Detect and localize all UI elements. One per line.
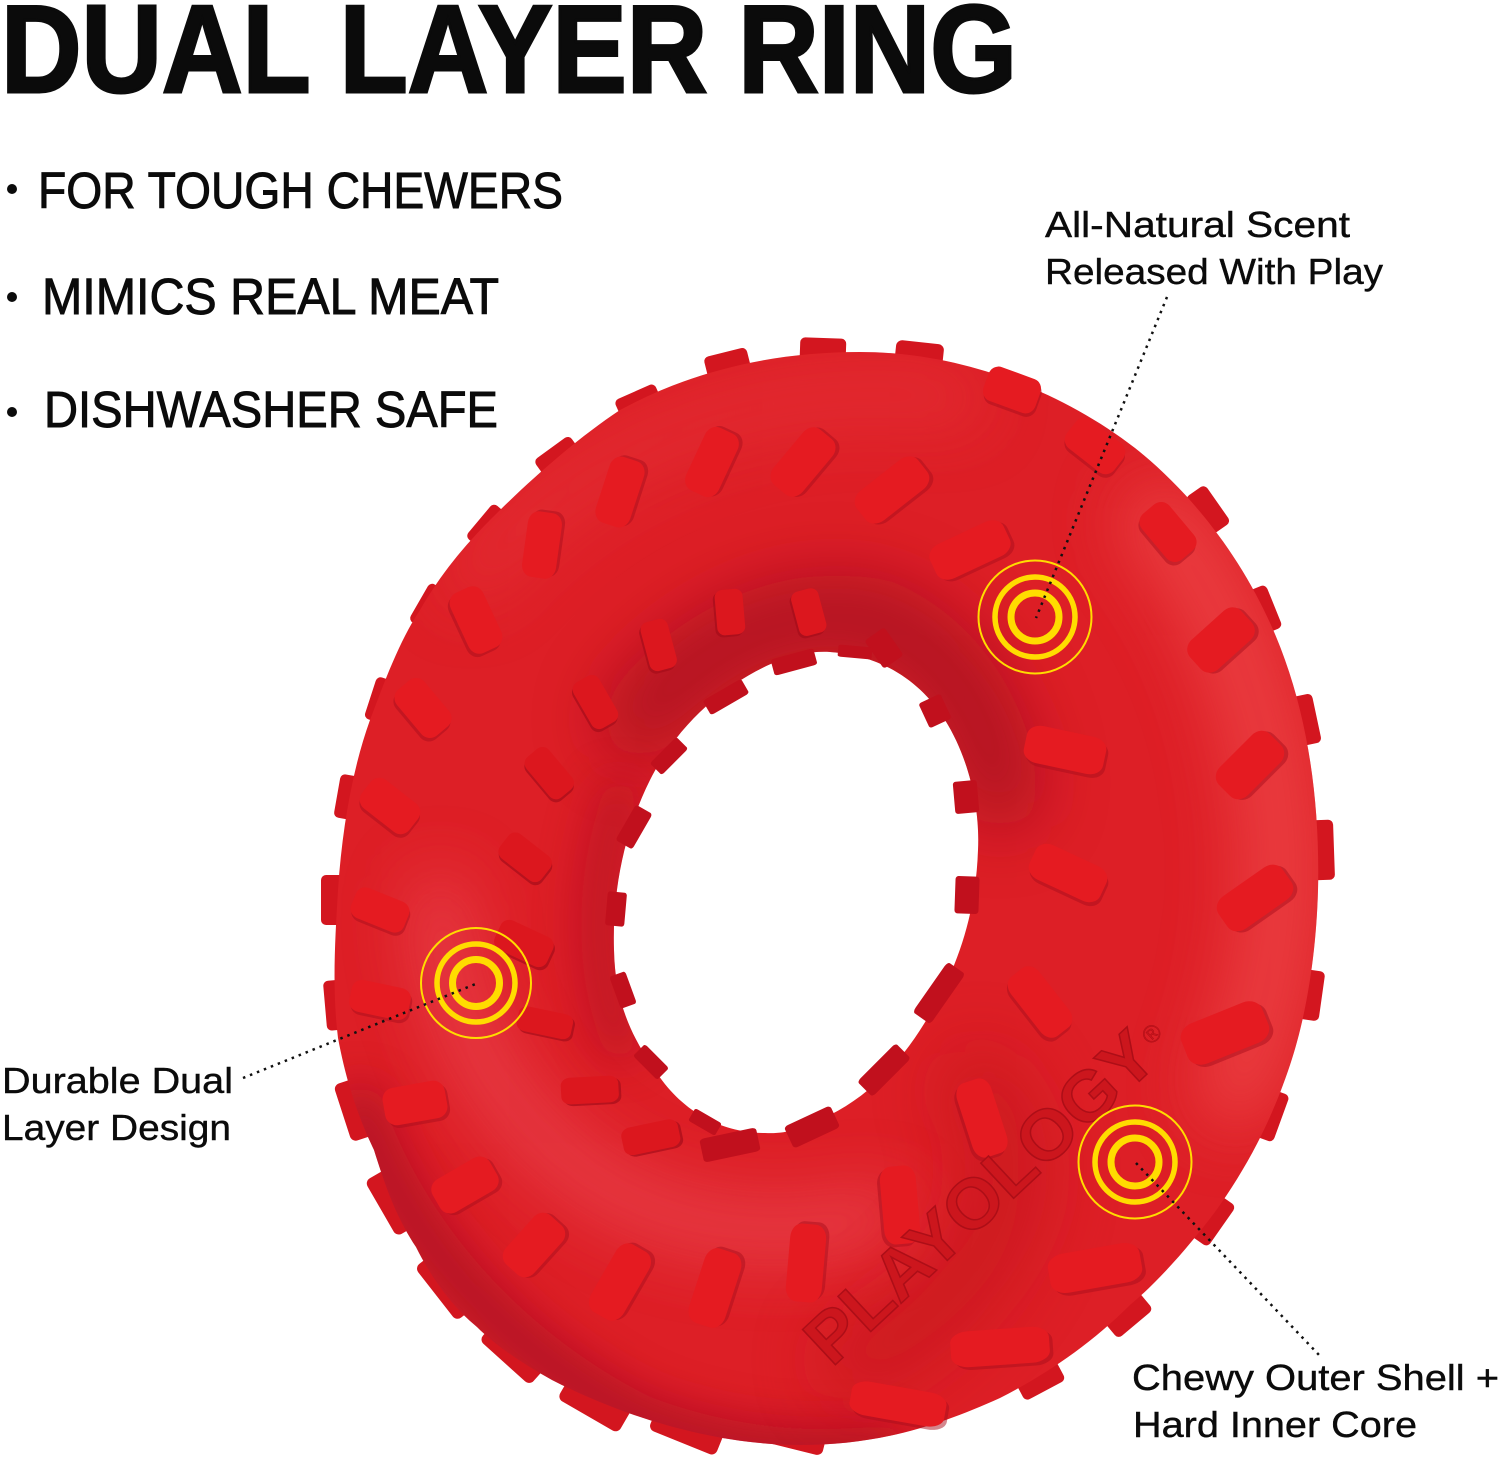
label: chewy outer shell: Hard Inner Core bbox=[1133, 1404, 1417, 1445]
embossed PLAYOLOGY logo: PLAYOLOGY bbox=[789, 1015, 1171, 1379]
tread nubs: middle band bbox=[346, 420, 1114, 1332]
ring body bbox=[335, 352, 1318, 1445]
bullet: mimics real meat: MIMICS REAL MEAT bbox=[42, 268, 499, 325]
label: all-natural scent: Released With Play bbox=[1045, 251, 1383, 292]
bullet: dishwasher safe: DISHWASHER SAFE bbox=[44, 381, 498, 438]
target marker: dual layer bbox=[421, 928, 531, 1038]
outer rim nubs bbox=[321, 337, 1335, 1456]
bullet list bbox=[7, 162, 563, 438]
ring shading bbox=[360, 393, 1280, 1454]
label: durable dual layer design bbox=[2, 1060, 233, 1148]
label: chewy outer shell bbox=[1132, 1357, 1499, 1445]
label: all-natural scent: All-Natural Scent bbox=[1045, 204, 1350, 245]
bullet: for tough chewers: FOR TOUGH CHEWERS bbox=[38, 162, 563, 219]
hole-edge teeth bbox=[605, 627, 980, 1163]
target marker: scent bbox=[978, 560, 1092, 674]
label: all-natural scent bbox=[1045, 204, 1383, 292]
red ring toy bbox=[321, 337, 1335, 1456]
tread nubs: inner band bbox=[490, 586, 829, 1159]
leader line: dual layer bbox=[243, 983, 478, 1078]
leader line: scent bbox=[1036, 297, 1167, 618]
tread nubs: right and bottom outer band bbox=[847, 364, 1302, 1433]
leader line: outer shell bbox=[1136, 1163, 1320, 1356]
label: durable dual layer design: Layer Design bbox=[2, 1107, 231, 1148]
target marker: outer shell bbox=[1078, 1106, 1192, 1218]
label: durable dual layer design: Durable Dual bbox=[2, 1060, 233, 1101]
label: chewy outer shell: Chewy Outer Shell + bbox=[1132, 1357, 1499, 1398]
embossed PLAYOLOGY logo: ® bbox=[1137, 1018, 1168, 1050]
